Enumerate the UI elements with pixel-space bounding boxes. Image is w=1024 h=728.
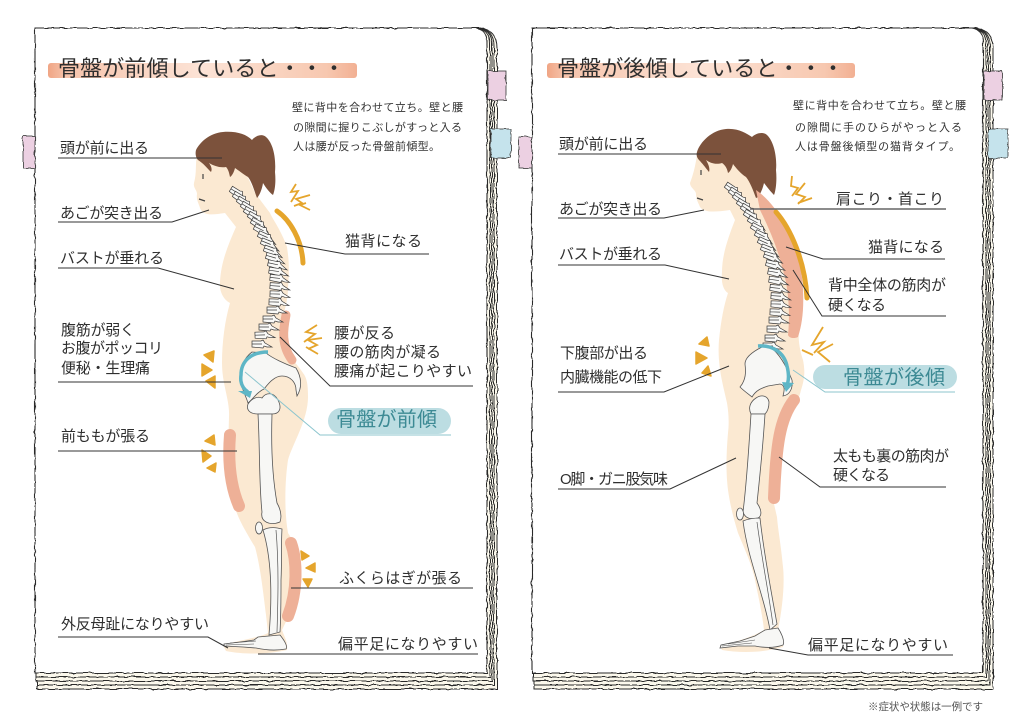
label: stiff back: 硬くなる <box>828 297 886 314</box>
label: lower abdomen: 下腹部が出る <box>560 345 648 362</box>
pain spark: lower back <box>304 325 322 354</box>
panel: posterior pelvic tilt <box>519 28 1008 689</box>
label: bust <box>558 246 729 279</box>
pelvic tilt arrow <box>238 352 268 398</box>
tibia <box>743 518 777 630</box>
stacked paper sheet <box>35 28 497 689</box>
label: lower back: 腰の筋肉が凝る <box>334 344 441 361</box>
label: bow legs: O脚・ガニ股気味 <box>560 471 668 488</box>
note text: 壁に背中を合わせて立ち。壁と腰 <box>793 97 966 113</box>
body silhouette <box>194 155 308 654</box>
muscle: whole back <box>756 190 803 338</box>
callout pill: pelvis posterior tilt: 骨盤が後傾 <box>843 366 945 389</box>
label: front thigh: 前ももが張る <box>61 428 150 445</box>
foot bones <box>224 635 287 650</box>
label: bust <box>58 250 234 289</box>
label: lower back: 腰痛が起こりやすい <box>334 363 472 380</box>
label: stiff shoulders: 肩こり・首こり <box>836 191 944 208</box>
muscle: back of thigh <box>774 400 794 498</box>
pain spark: upper back <box>291 184 310 210</box>
body silhouette <box>690 155 804 652</box>
label: abdomen: 便秘・生理痛 <box>61 360 150 377</box>
orange back arc <box>776 212 807 298</box>
note text: 壁に背中を合わせて立ち。壁と腰 <box>292 99 463 115</box>
fibula line <box>276 530 278 632</box>
patella <box>256 522 262 534</box>
callout pill: pelvis posterior tilt <box>793 365 957 392</box>
footnote: ※症状や状態は一例です <box>868 700 983 713</box>
label: bunion: 外反母趾になりやすい <box>61 616 209 633</box>
label: chin <box>58 205 209 222</box>
pain spark: lower back <box>802 327 833 362</box>
triangle markers <box>696 337 711 376</box>
tibia <box>263 528 282 635</box>
index tabs <box>519 71 1008 168</box>
label: bust: バストが垂れる <box>60 250 164 267</box>
spine <box>724 181 791 350</box>
hair <box>697 129 776 198</box>
pain spark: upper back <box>791 176 812 204</box>
title: 骨盤が後傾していると・・・ <box>557 56 844 81</box>
label: rounded back <box>285 233 429 254</box>
femur <box>258 414 281 524</box>
note text: の隙間に握りこぶしがすっと入る <box>293 119 462 135</box>
label: lower abdomen: 内臓機能の低下 <box>560 369 662 386</box>
figure: body with anterior tilt <box>194 132 308 654</box>
figure: body with posterior tilt <box>690 129 804 652</box>
label: rounded back <box>786 239 945 259</box>
index tabs <box>23 71 511 168</box>
label: bust: バストが垂れる <box>559 246 662 263</box>
pelvis <box>240 352 301 414</box>
pelvic tilt arrow <box>758 346 794 392</box>
label: flat foot: 偏平足になりやすい <box>808 637 948 654</box>
patella <box>736 508 744 520</box>
label: stiff back: 背中全体の筋肉が <box>828 277 946 294</box>
femur <box>743 414 765 519</box>
label: calf: ふくらはぎが張る <box>339 570 462 587</box>
stacked paper sheet <box>532 28 993 689</box>
label: chin: あごが突き出る <box>60 205 163 222</box>
fibula line <box>757 522 773 625</box>
label: lower back <box>280 325 473 386</box>
label: bunion <box>58 616 228 648</box>
label: rounded back: 猫背になる <box>345 233 422 250</box>
label: abdomen: 腹筋が弱く <box>61 322 135 339</box>
callout pill: pelvis anterior tilt <box>245 372 451 435</box>
triangle markers <box>202 351 315 587</box>
femur head <box>247 394 280 414</box>
label: lower abdomen <box>558 345 729 392</box>
muscle: calf <box>288 543 296 616</box>
label: stiff back <box>793 270 946 316</box>
note text: の隙間に手のひらがやっと入る <box>795 119 962 135</box>
label: abdomen: お腹がポッコリ <box>61 340 163 357</box>
hair <box>196 132 275 198</box>
label: bow legs <box>558 458 736 489</box>
label: back of thigh: 太もも裏の筋肉が <box>833 448 949 465</box>
label: rounded back: 猫背になる <box>868 239 944 256</box>
label: head forward: 頭が前に出る <box>60 140 149 157</box>
callout pill: pelvis anterior tilt: 骨盤が前傾 <box>336 408 437 431</box>
femur head <box>750 396 769 414</box>
note text: 人は骨盤後傾型の猫背タイプ。 <box>795 138 960 154</box>
label: back of thigh <box>779 448 949 487</box>
label: head forward: 頭が前に出る <box>559 136 648 153</box>
orange back arc <box>277 211 303 263</box>
label: lower back: 腰が反る <box>334 325 395 342</box>
foot bones <box>720 628 784 648</box>
label: abdomen <box>58 322 231 382</box>
note text: 人は腰が反った骨盤前傾型。 <box>293 138 440 154</box>
face details <box>199 174 205 201</box>
label: flat foot: 偏平足になりやすい <box>338 636 478 653</box>
panel: anterior pelvic tilt <box>23 28 511 689</box>
label: chin: あごが突き出る <box>559 201 662 218</box>
label: back of thigh: 硬くなる <box>833 467 890 484</box>
title: 骨盤が前傾していると・・・ <box>58 56 345 81</box>
spine <box>229 185 290 348</box>
pelvis <box>740 347 792 414</box>
muscle: front thigh <box>229 435 239 506</box>
muscle: lower back <box>284 315 292 360</box>
face details <box>697 170 703 200</box>
note text <box>292 99 463 154</box>
note text <box>793 97 966 154</box>
